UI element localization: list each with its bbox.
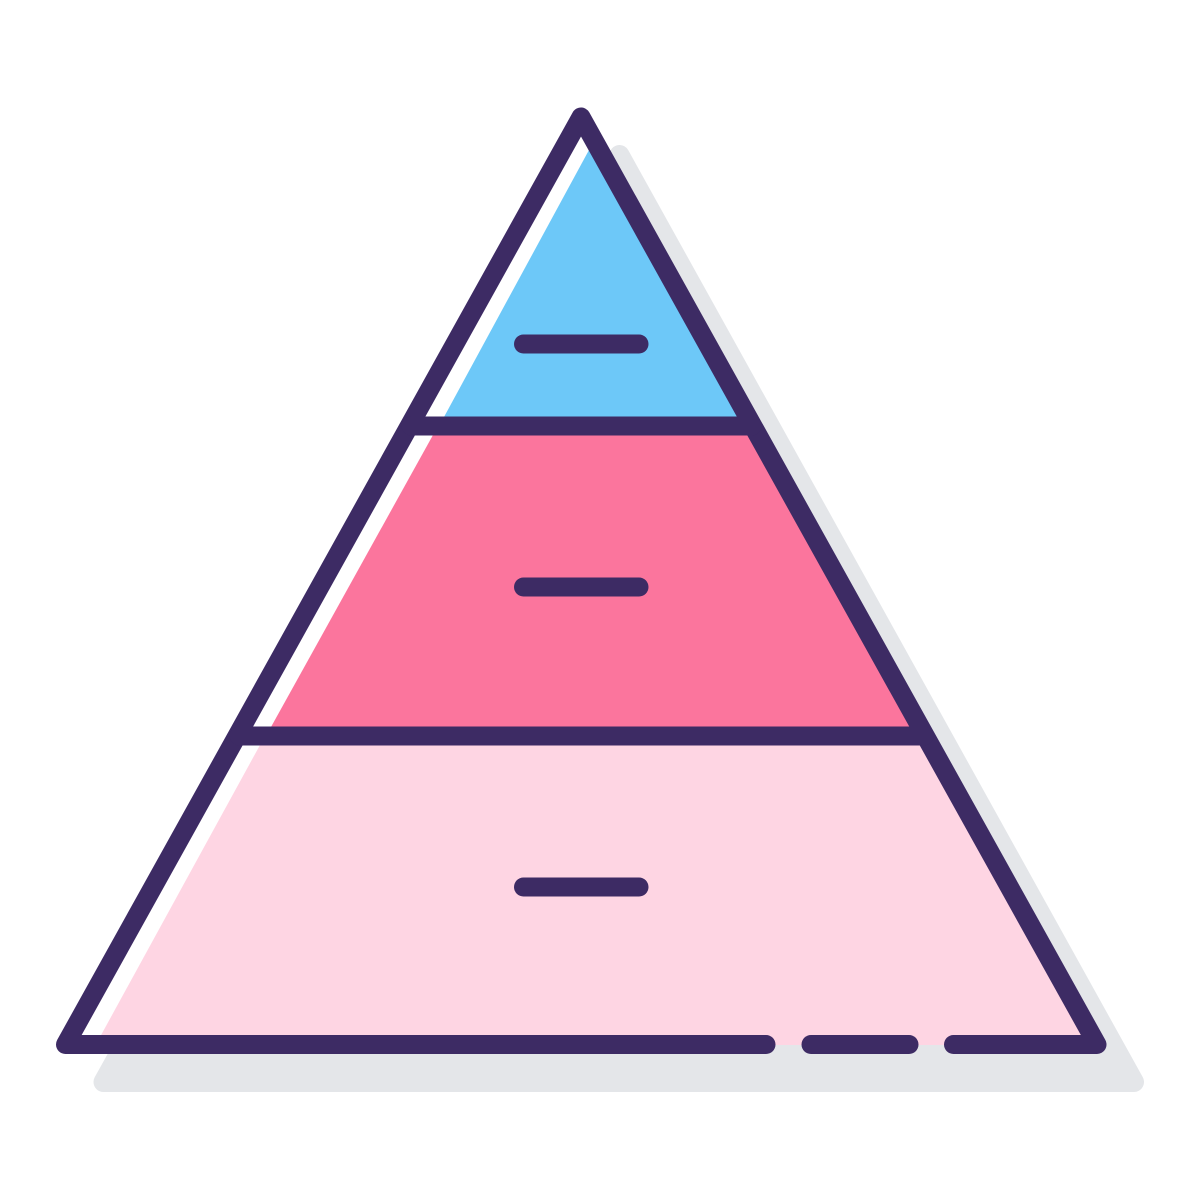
label dash: bottom tier <box>524 878 639 896</box>
white pyramid base <box>66 117 1097 1044</box>
pyramid outline <box>66 117 1097 1044</box>
tier: middle pink <box>271 435 911 727</box>
tier: bottom light pink <box>100 745 1084 1045</box>
label dash: middle tier <box>524 578 639 596</box>
tier: top blue <box>444 150 739 417</box>
drop shadow of pyramid <box>104 155 1134 1082</box>
label dash: top tier <box>524 334 639 354</box>
